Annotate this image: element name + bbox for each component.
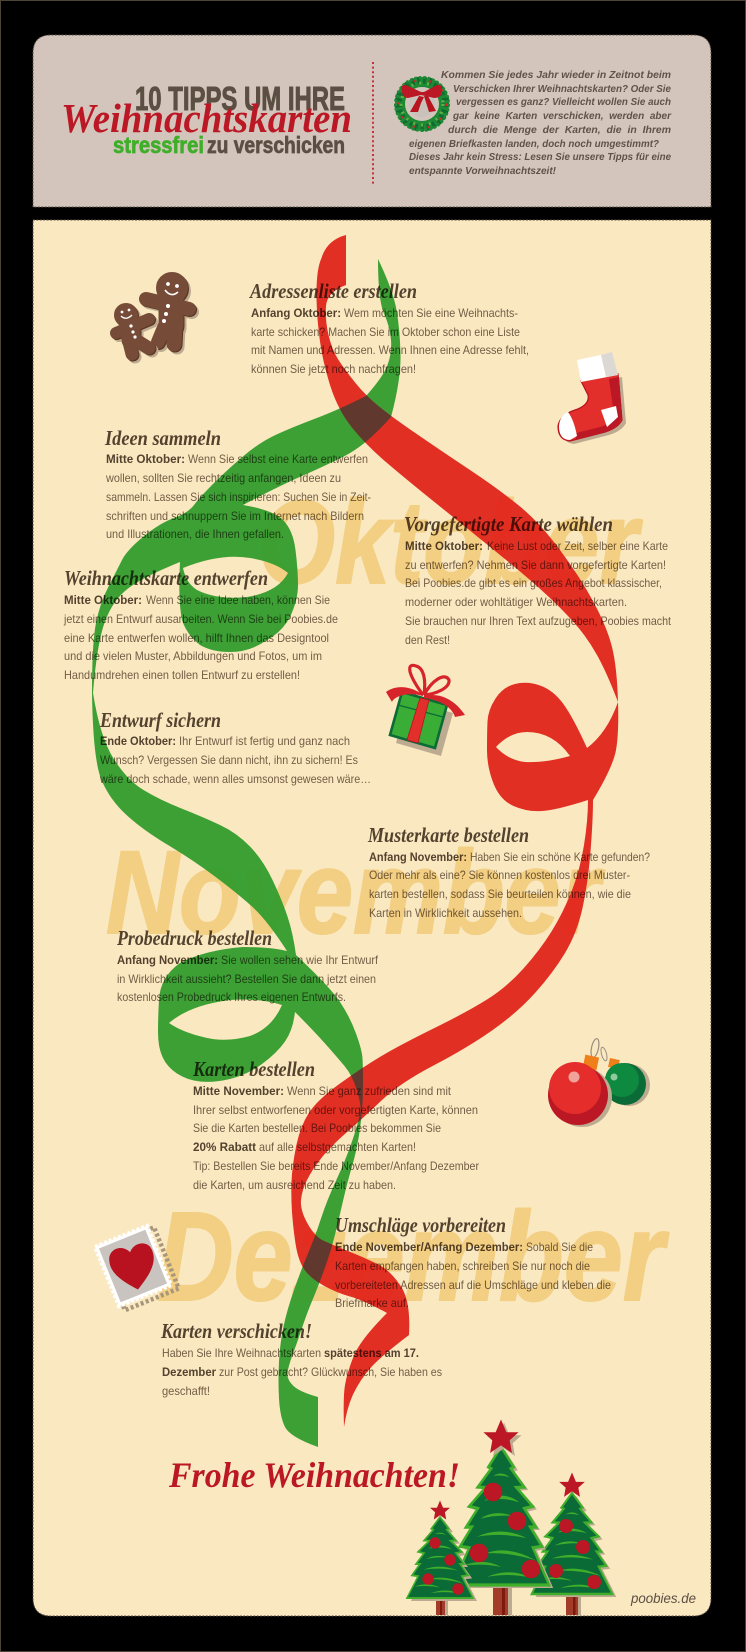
text block: Ende Oktober: [100,734,176,748]
text block: Tip: Bestellen Sie bereits Ende November/Anfang Dezember [193,1159,479,1173]
panel: header [33,35,711,207]
text block [105,452,371,541]
title [61,80,352,158]
tip 1 [248,279,529,376]
icon: stamp [95,1224,179,1312]
text block: Sie wollen sehen wie Ihr Entwurf [221,953,379,967]
text block: die Karten, um ausreichend Zeit zu haben. [193,1178,396,1192]
text block: intro: durch die Menge der Karten, die in Ihrem [448,124,671,136]
text block: intro: gar keine Karten verschicken, werden aber [452,110,672,122]
heading: Weihnachtskarte entwerfen [64,566,268,590]
text block: und die vielen Muster, Abbildungen und Fotos, um im [64,649,322,663]
text block: intro [409,69,672,177]
tip 4 [99,708,371,786]
icon: christmas trees [407,1420,616,1615]
medium tree [532,1472,616,1615]
text block: Mitte Oktober: [405,539,483,553]
text block [335,1240,611,1310]
small tree [407,1500,477,1615]
closing greeting: Frohe Weihnachten! [168,1455,460,1495]
heading: Vorgefertigte Karte wählen [404,512,613,536]
tip 8 [192,1057,479,1192]
text block: schriften und schnuppern Sie im Internet nach Bildern [106,509,364,523]
text block: Wunsch? Vergessen Sie dann nicht, ihn zu sichern! Es [100,753,358,767]
text block: intro: Dieses Jahr kein Stress: Lesen Sie unsere Tipps für eine [409,151,671,163]
text block: Oder mehr als eine? Sie können kostenlos drei Muster- [369,868,630,882]
icon: gingerbread men [114,272,192,357]
title: 10 TIPPS UM IHRE [135,80,345,117]
text block: zu entwerfen? Nehmen Sie dann vorgefertigte Karten! [405,558,666,572]
ribbon: green [92,259,401,1447]
text block [99,734,371,786]
icon: baubles [548,1038,650,1127]
tip 7 [116,926,379,1004]
text block: karte schicken? Machen Sie im Oktober schon eine Liste [251,325,520,339]
text block: Handumdrehen einen tollen Entwurf zu erstellen! [64,668,300,682]
text block: Haben Sie Ihre Weihnachtskarten [162,1346,321,1360]
tip 9 [335,1213,611,1310]
icon: wreath [396,78,448,130]
text block: wäre doch schade, wenn alles umsonst gewesen wäre… [99,772,371,786]
text block: Mitte Oktober: [64,593,142,607]
text block: Dezember [162,1365,216,1379]
text block: Sie die Karten bestellen. Bei Poobies bekommen Sie [193,1121,441,1135]
tip 6 [367,823,650,920]
text block: karten bestellen, sodass Sie beurteilen können, wie die [369,887,631,901]
text block: geschafft! [162,1384,210,1398]
heading: Karten verschicken! [160,1319,312,1343]
text block: intro: Verschicken Ihrer Weihnachtskarten? Oder Sie [453,83,671,95]
text block [369,850,650,920]
text block: Briefmarke auf. [335,1296,409,1310]
text block: mit Namen und Adressen. Wenn Ihnen eine Adresse fehlt, [251,343,529,357]
month: Oktober: Oktober [258,477,643,609]
heading: Entwurf sichern [99,708,221,732]
text block: moderner oder wohltätiger Weihnachtskarten. [405,595,627,609]
text block: Mitte November: [193,1084,284,1098]
text block: Wem möchten Sie eine Weihnachts- [344,306,518,320]
big tree [453,1420,553,1615]
text block: Keine Lust oder Zeit, selber eine Karte [487,539,668,553]
tip 3 [63,566,338,682]
ribbon: red [291,235,618,1427]
text block: sammeln. Lassen Sie sich inspirieren: Suchen Sie in Zeit- [106,490,371,504]
text block: Karten empfangen haben, schreiben Sie nur noch die [335,1259,590,1273]
text block [117,953,379,1004]
text block: können Sie jetzt noch nachfragen! [251,362,416,376]
tip 5 [404,512,672,647]
text block: vorbereiteten Adressen auf die Umschläge und kleben die [335,1278,611,1292]
tip 2 [104,426,371,541]
text block: intro: Kommen Sie jedes Jahr wieder in Zeitnot beim [441,69,671,81]
text block [162,1346,442,1398]
heading: Ideen sammeln [104,426,221,450]
text block [405,539,672,647]
title: zu verschicken [207,132,345,158]
month: November: November [106,827,605,959]
text block: Sobald Sie die [526,1240,593,1254]
text block: intro: vergessen es ganz? Vielleicht wollen Sie auch [456,96,671,108]
text block: spätestens am 17. [324,1346,419,1360]
text block: intro: eigenen Briefkasten landen, doch noch umgestimmt? [409,138,660,150]
heading: Karten bestellen [192,1057,315,1081]
heading: Adressenliste erstellen [248,279,417,303]
text block: Ihr Entwurf ist fertig und ganz nach [179,734,350,748]
text block: Anfang November: [369,850,467,864]
text block [63,593,338,682]
text block: Mitte Oktober: [106,452,185,466]
text block: 20% Rabatt [193,1140,256,1154]
text block: Bei Poobies.de gibt es ein großes Angebot klassischer, [405,576,662,590]
text block: jetzt einen Entwurf ausarbeiten. Wenn Sie bei Poobies.de [63,612,338,626]
text block: Karten in Wirklichkeit aussehen. [369,906,522,920]
title: Weihnachtskarten [61,95,352,141]
text block: wollen, sollten Sie rechtzeitig anfangen, Ideen zu [105,471,341,485]
panel: main [33,220,711,1616]
tip 10 [160,1319,442,1398]
text block: auf alle selbstgemachten Karten! [259,1140,416,1154]
text block: kostenlosen Probedruck Ihres eigenen Entwurfs. [117,990,346,1004]
ribbon crossings [302,395,392,1283]
heading: Umschläge vorbereiten [335,1213,506,1237]
text block: zur Post gebracht? Glückwunsch, Sie haben es [219,1365,442,1379]
icon: stocking [558,352,626,444]
heading: Probedruck bestellen [116,926,272,950]
text block: Ende November/Anfang Dezember: [335,1240,523,1254]
text block: eine Karte entwerfen wollen, hilft Ihnen das Designtool [64,631,329,645]
text block: Wenn Sie selbst eine Karte entwerfen [188,452,368,466]
month: Dezember: Dezember [157,1186,669,1327]
title: stressfrei [113,132,204,158]
text block: intro: entspannte Vorweihnachtszeit! [409,165,556,177]
text block: Wenn Sie eine Idee haben, können Sie [146,593,330,607]
source: poobies.de: poobies.de [630,1590,696,1606]
heading: Musterkarte bestellen [367,823,529,847]
text block: Anfang November: [117,953,218,967]
text block: den Rest! [405,633,450,647]
text block [251,306,529,376]
icon: gift [386,665,465,756]
text block: Sie brauchen nur Ihren Text aufzugeben, Poobies macht [405,614,672,628]
text block: in Wirklichkeit aussieht? Bestellen Sie dann jetzt einen [117,972,376,986]
text block: und Illustrationen, die Ihnen gefallen. [106,527,284,541]
text block: Ihrer selbst entworfenen oder vorgefertigten Karte, können [193,1103,478,1117]
text block: Haben Sie ein schöne Karte gefunden? [470,850,650,864]
text block [193,1084,479,1192]
text block: Wenn Sie ganz zufrieden sind mit [287,1084,452,1098]
text block: Anfang Oktober: [251,306,341,320]
